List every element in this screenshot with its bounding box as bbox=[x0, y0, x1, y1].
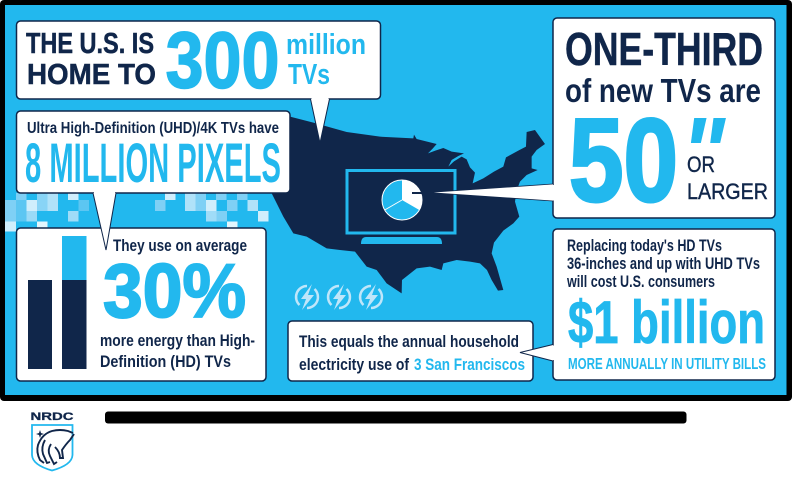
lightning icon 2 bbox=[328, 284, 350, 310]
callout: 3 San Franciscos: electricity use of bbox=[299, 355, 409, 374]
callout: 3 San Franciscos: 3 San Franciscos bbox=[414, 355, 525, 374]
callout: 8 million pixels bbox=[16, 111, 290, 250]
callout: 30% more energy: more energy than High- bbox=[100, 332, 255, 350]
bar chart bbox=[28, 236, 86, 369]
callout: one-third of new TVs: LARGER bbox=[687, 179, 768, 204]
pixel squares decoration right bbox=[155, 193, 268, 228]
callout: one-third of new TVs: 50 bbox=[569, 95, 678, 227]
callout: one-third of new TVs bbox=[412, 18, 775, 227]
map of the United States bbox=[260, 115, 545, 293]
tv screen outline bbox=[347, 170, 455, 233]
NRDC logo: NRDC bbox=[30, 411, 74, 423]
pie chart one third bbox=[382, 180, 422, 220]
tv icon on map bbox=[347, 170, 455, 244]
callout: 30% more energy: 30% bbox=[103, 249, 246, 334]
black redaction bar bbox=[105, 412, 686, 424]
callout: 300 million TVs bbox=[16, 16, 380, 143]
lightning icon 3 bbox=[360, 284, 382, 310]
callout: one-third of new TVs: " bbox=[681, 97, 726, 209]
callout: $1 billion bbox=[520, 229, 775, 380]
lightning icon 1 bbox=[296, 284, 318, 310]
speech tail pointing to pie bbox=[412, 184, 555, 201]
callout: 3 San Franciscos: This equals the annual household bbox=[299, 332, 519, 351]
pixel squares decoration left bbox=[5, 193, 89, 232]
speech tail bbox=[93, 193, 116, 250]
speech tail pointing left bbox=[520, 344, 554, 361]
callout: 8 million pixels: Ultra High-Definition (UHD)/4K TVs have bbox=[27, 120, 279, 137]
shield bbox=[32, 425, 72, 470]
callout: $1 billion: Replacing today's HD TVs bbox=[567, 237, 722, 255]
callout: 300 million TVs: million bbox=[286, 29, 366, 61]
speech tail bbox=[310, 99, 330, 143]
callout: one-third of new TVs: OR bbox=[687, 152, 715, 177]
callout: 30% more energy bbox=[16, 228, 266, 381]
callout: 3 San Franciscos bbox=[288, 321, 533, 381]
star bbox=[36, 430, 44, 438]
bear bbox=[37, 430, 74, 464]
NRDC logo bbox=[30, 411, 74, 470]
callout: 8 million pixels: 8 MILLION PIXELS bbox=[25, 131, 281, 194]
callout: 300 million TVs: 300 bbox=[166, 16, 280, 104]
callout: 300 million TVs: TVs bbox=[288, 59, 330, 91]
lightning energy icons bbox=[296, 284, 382, 310]
callout: one-third of new TVs: of new TVs are bbox=[565, 72, 761, 109]
tv stand bbox=[361, 237, 442, 244]
callout: $1 billion: will cost U.S. consumers bbox=[566, 273, 715, 291]
callout: 300 million TVs: HOME TO bbox=[27, 59, 156, 91]
callout: 30% more energy: Definition (HD) TVs bbox=[100, 353, 231, 371]
callout: 30% more energy: They use on average bbox=[113, 237, 247, 255]
callout: 300 million TVs: THE U.S. IS bbox=[26, 28, 154, 60]
